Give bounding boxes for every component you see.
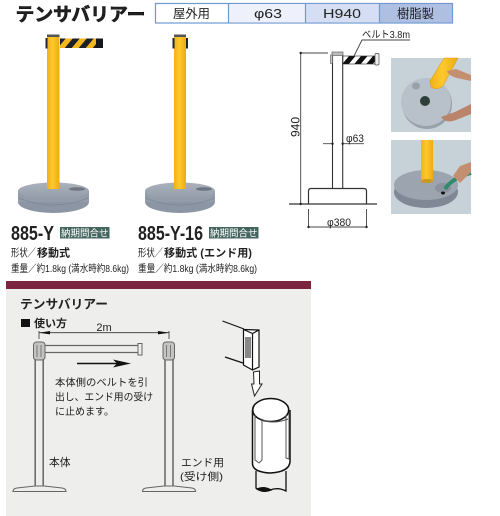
product info: 885-Y: 885-Y	[11, 223, 55, 245]
product info: 885-Y-16: 形状／	[138, 246, 163, 259]
product info: 885-Y-16: 885-Y-16	[138, 223, 203, 245]
product info: 885-Y-16: 納期問合せ	[210, 228, 258, 240]
product info: 885-Y: 納期問合せ	[61, 228, 108, 240]
product info: 885-Y-16: 重量／約1.8kg (満水時約8.6kg)	[138, 262, 257, 275]
product info: 885-Y-16	[138, 223, 258, 275]
label: end side	[180, 457, 224, 483]
product info: 885-Y: 移動式	[37, 246, 70, 260]
label: end side: (受け側)	[180, 470, 223, 483]
instruction text	[55, 376, 153, 418]
receiver detail	[252, 398, 290, 491]
spec chips	[156, 3, 452, 23]
product: 885-Y barrier	[18, 34, 103, 213]
panel: how to use	[6, 281, 311, 516]
product info: 885-Y: 形状／	[11, 246, 36, 259]
subheading	[21, 316, 67, 330]
product info: 885-Y	[11, 223, 129, 275]
instruction text: 出し、エンド用の受け	[55, 392, 153, 404]
span dimension 2m	[39, 322, 169, 339]
product info: 885-Y: 重量／約1.8kg (満水時約8.6kg)	[11, 262, 129, 275]
spec chips: φ63	[254, 6, 282, 21]
spec chips: H940	[323, 6, 361, 21]
belt end detail	[222, 321, 259, 370]
label: end side: エンド用	[181, 457, 224, 469]
dimension labels	[288, 29, 410, 229]
product info: 885-Y-16: 移動式 (エンド用)	[164, 246, 252, 260]
instruction text: に止めます。	[55, 406, 114, 418]
dimension labels: φ63	[346, 133, 364, 145]
photo: lifting pole off base	[391, 58, 471, 132]
dimension drawing	[289, 40, 410, 228]
subheading: 使い方	[34, 316, 67, 330]
product: 885-Y-16 barrier	[145, 34, 215, 213]
photo: filling base with water	[391, 140, 471, 214]
dimension labels: ベルト3.8m	[362, 29, 410, 41]
arrow: pull belt	[77, 360, 131, 368]
dimension labels: φ380	[327, 217, 351, 229]
arrow: insert down	[252, 371, 262, 396]
panel heading: テンサバリアー	[20, 298, 108, 312]
main barrier line drawing	[13, 342, 142, 492]
dimension labels: 940	[288, 117, 302, 137]
spec chips: 樹脂製	[397, 6, 434, 21]
title: テンサバリアー	[16, 4, 146, 25]
span dimension 2m: 2m	[96, 322, 112, 334]
instruction text: 本体側のベルトを引	[55, 376, 148, 389]
spec chips: 屋外用	[173, 7, 210, 21]
label: main body: 本体	[49, 455, 71, 469]
end barrier line drawing	[142, 342, 196, 492]
